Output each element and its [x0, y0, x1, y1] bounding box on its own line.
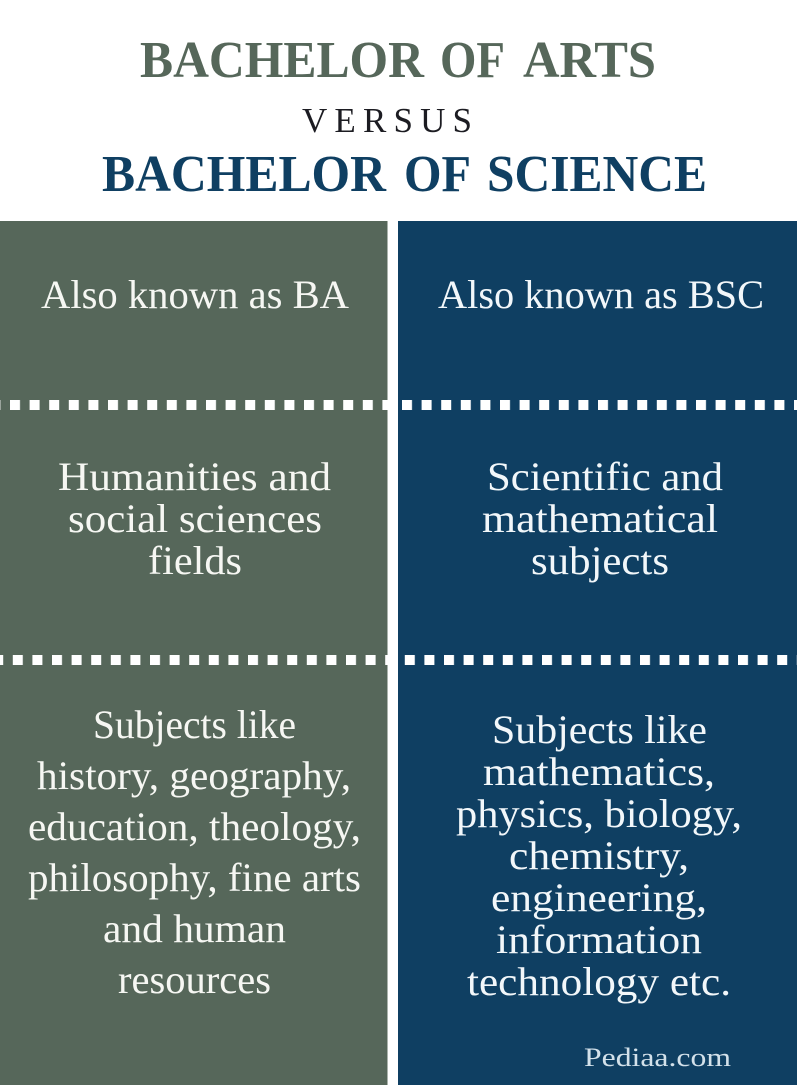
title: Bachelor of Arts	[140, 32, 656, 89]
title: Bachelor of Arts: BACHELOR	[140, 32, 425, 89]
text: BSC also known as: Also known as BSC	[438, 272, 764, 317]
text: BA subjects: history, geography,	[37, 753, 351, 798]
text: BSC subjects: mathematics,	[483, 749, 715, 794]
title: versus: VERSUS	[302, 101, 472, 140]
text: BA subjects: education, theology,	[28, 804, 361, 849]
text: BA subjects	[28, 702, 361, 1002]
text: BSC subjects	[456, 707, 742, 1004]
title: Bachelor of Science: OF	[404, 146, 471, 203]
title: Bachelor of Arts: OF	[440, 32, 505, 89]
title: Bachelor of Science	[102, 146, 707, 203]
text: BSC subjects: technology etc.	[467, 959, 731, 1004]
text: BA subjects: philosophy, fine arts	[28, 855, 361, 900]
text: BSC fields: mathematical	[482, 496, 718, 541]
text: BA fields	[58, 454, 331, 583]
text: BSC subjects: Subjects like	[492, 707, 707, 752]
text: BSC fields: subjects	[531, 538, 669, 583]
text: BA subjects: and human	[103, 906, 286, 951]
text: BA fields: Humanities and	[58, 454, 331, 499]
text: BSC fields	[482, 454, 723, 583]
text: BSC fields: Scientific and	[487, 454, 723, 499]
panel: Bachelor of Science column	[398, 221, 797, 1085]
text: BA subjects: resources	[118, 957, 271, 1002]
title: Bachelor of Science: BACHELOR	[102, 146, 387, 203]
text: BSC subjects: physics, biology,	[456, 791, 742, 836]
title block	[102, 32, 707, 203]
dotted divider: first row	[0, 400, 799, 410]
text: BA also known as: Also known as BA	[41, 272, 349, 317]
dotted divider: second row	[0, 655, 799, 665]
text: BA subjects: Subjects like	[93, 702, 296, 747]
text: BA fields: fields	[148, 538, 242, 583]
text: BSC subjects: information	[496, 917, 702, 962]
title: Bachelor of Arts: ARTS	[523, 32, 656, 89]
text: BSC subjects: chemistry,	[509, 833, 689, 878]
text: BSC subjects: engineering,	[491, 875, 707, 920]
watermark: Pediaa.com: Pediaa.com	[584, 1043, 731, 1072]
text: BA fields: social sciences	[68, 496, 322, 541]
panel: Bachelor of Arts column	[0, 221, 388, 1085]
title: Bachelor of Science: SCIENCE	[487, 146, 707, 203]
